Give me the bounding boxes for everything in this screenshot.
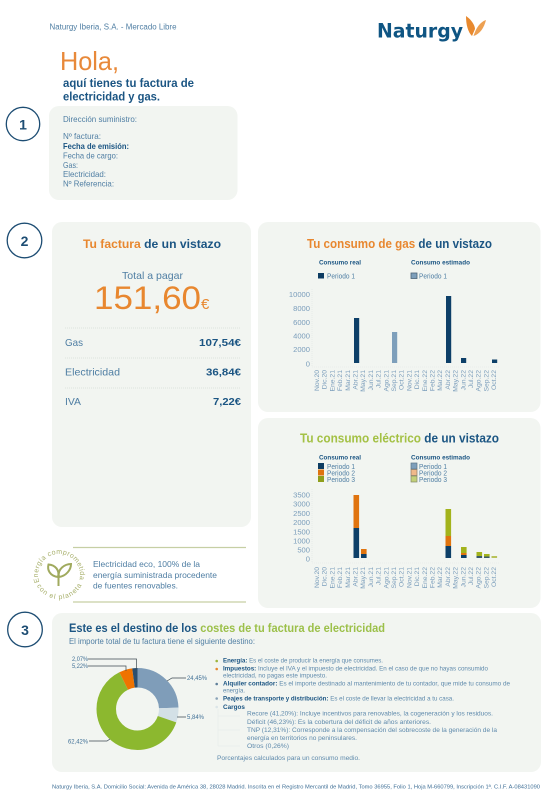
bar chart: electricity: 3000 [293, 500, 310, 508]
row: VAT: IVA [65, 396, 81, 408]
callout: eco electricity [34, 546, 246, 603]
bar chart: gas: May.21 [360, 370, 367, 392]
legend: gas: Periodo 1 [419, 272, 447, 280]
greeting: electricidad y gas. [63, 92, 160, 104]
panel: electricity consumption [258, 418, 540, 608]
bar chart: gas: Oct.21 [399, 370, 406, 390]
step number 2 [7, 223, 42, 258]
row: gas: 107,54€ [199, 337, 241, 349]
bar chart: gas: 6000 [293, 318, 310, 327]
legend: cost concepts: Energía: Es el coste de producir la energía que consumes. [223, 658, 383, 665]
bar chart: electricity: Ago.22 [476, 567, 483, 589]
bar chart: gas: 4000 [293, 332, 310, 340]
bar chart: gas: Abr.21 [352, 370, 360, 390]
legend: cost concepts: Otros (0,26%) [247, 743, 289, 750]
panel: bill summary [52, 222, 251, 527]
bar chart: electricity [293, 489, 500, 589]
greeting: aquí tienes tu factura de [63, 78, 194, 90]
row: gas: Gas [65, 337, 83, 349]
legend: electricity: Periodo 2 [419, 468, 447, 478]
bar chart: gas: 10000 [289, 290, 310, 299]
bar chart: electricity: Jun.22 [460, 567, 467, 587]
logo: Naturgy: Naturgy [377, 20, 463, 42]
bar chart: gas: Feb.22 [430, 370, 436, 391]
legend: gas: Periodo 1 [327, 272, 355, 280]
legend: cost concepts: Cargos [223, 704, 245, 711]
legend: cost concepts: Impuestos: Incluye el IVA y el impuesto de electricidad. En el caso de que no hayas consumido [223, 666, 488, 673]
bar chart: electricity: Nov.20 [314, 567, 321, 588]
badge: committed energy: con el planeta [37, 584, 82, 601]
bar chart: electricity: Jul.22 [468, 567, 475, 585]
total amount: 151,60 [94, 280, 201, 316]
bar chart: electricity: Mar.21 [345, 567, 352, 588]
bar chart: electricity: Dic.21 [414, 567, 421, 586]
legend: electricity: Periodo 2 [327, 468, 355, 478]
bar chart: gas: Jun.22 [460, 370, 467, 390]
legend: electricity: Consumo estimado [411, 456, 470, 462]
icon: sprout [48, 564, 71, 586]
bar chart: gas: Dic.20 [322, 370, 329, 389]
bar chart: gas: Nov.21 [406, 370, 413, 391]
bar chart: gas: Jul.21 [376, 370, 383, 388]
bar chart: gas: Dic.21 [414, 370, 421, 389]
legend: gas: Consumo real [319, 260, 361, 266]
row: electricity [65, 366, 241, 378]
dotted dividers [65, 328, 241, 388]
bar chart: electricity: Ago.21 [383, 567, 390, 589]
legend: electricity: Periodo 3 [419, 475, 447, 484]
legend: cost concepts: Alquiler contador: Es el importe destinado al mantenimiento de tu contador, que mide tu consumo de [223, 681, 510, 688]
bar chart: gas [289, 289, 500, 392]
bar chart: electricity: 500 [297, 546, 310, 554]
donut chart: 2,07% [72, 657, 89, 663]
bar chart: electricity: May.22 [453, 567, 460, 589]
bar chart: electricity: Feb.21 [337, 567, 344, 588]
row: VAT [65, 396, 241, 408]
panel: supply details [49, 106, 238, 200]
step number 1: 1 [19, 116, 27, 132]
bar chart: gas: 2000 [293, 345, 310, 354]
bar chart: electricity: 1500 [293, 528, 310, 536]
bar chart: electricity: 2500 [293, 509, 310, 518]
panel: supply details: Nº Referencia: [63, 180, 114, 188]
bar chart: gas: Mar.21 [345, 370, 352, 391]
bar chart: electricity: Ene.21 [329, 567, 336, 589]
bar chart: gas: Sep.21 [391, 370, 398, 392]
subtitle: El importe total de tu factura tiene el siguiente destino: [69, 637, 255, 646]
legend: cost concepts: TNP (12,31%): Corresponde a la compensación del sobrecoste de la generación de la [247, 727, 497, 734]
total amount [94, 270, 210, 316]
bar chart: electricity: Oct.21 [399, 567, 406, 587]
eco text: de fuentes renovables. [93, 580, 178, 590]
bar chart: gas: Oct.22 [491, 370, 498, 390]
badge: committed energy: Energía comprometida [34, 550, 86, 583]
bar chart: electricity: Dic.20 [322, 567, 329, 586]
legend: cost concepts: electricidad, no pagas este impuesto. [223, 672, 327, 679]
panel: supply details: Fecha de cargo: [63, 152, 118, 160]
heading: bill summary: Tu factura de un vistazo [83, 237, 221, 251]
eco text: Electricidad eco, 100% de la [93, 559, 200, 569]
bar chart: electricity: Sep.21 [391, 567, 398, 589]
step number 1 [6, 107, 40, 141]
legend: cost concepts: energía. [223, 688, 245, 695]
bar chart: electricity: Abr.21 [352, 567, 360, 587]
bar chart: electricity: Sep.22 [483, 567, 490, 589]
step number 3 [8, 612, 42, 647]
heading: cost breakdown: Este es el destino de los costes de tu factura de electricidad [69, 621, 385, 635]
legend: electricity: Periodo 1 [327, 462, 355, 471]
bar chart: electricity: Jul.21 [376, 567, 383, 585]
legend: cost concepts: Porcentajes calculados para un consumo medio. [217, 755, 360, 762]
row: electricity: Electricidad [65, 366, 120, 378]
bar chart: electricity: 3500 [293, 490, 310, 500]
legend: cost concepts: Déficit (46,23%): Es la cobertura del déficit de años anteriores. [247, 719, 431, 726]
donut chart: 62,42% [68, 740, 89, 746]
bar chart: gas: Nov.20 [314, 370, 321, 391]
bar chart: electricity: Oct.22 [491, 567, 498, 587]
legend: electricity: Consumo real [319, 456, 361, 462]
total amount: € [201, 296, 210, 313]
legend: cost concepts: Recore (41,20%): Incluye incentivos para renovables, la cogeneración y los residuos. [247, 710, 493, 718]
bar chart: electricity: Jun.21 [368, 567, 375, 587]
panel: supply details: Fecha de emisión: [63, 142, 129, 151]
bar chart: electricity: 1000 [293, 536, 310, 546]
bar chart: gas: Feb.21 [337, 370, 344, 391]
legend: cost concepts: Peajes de transporte y distribución: Es el coste de llevar la electricidad a tu casa. [223, 695, 454, 702]
panel: supply details: Nº factura: [63, 132, 101, 141]
panel: supply details: Dirección suministro: [63, 115, 137, 124]
bar chart: gas: Ago.22 [476, 370, 483, 392]
legend: cost concepts: energía en territorios no peninsulares. [247, 735, 357, 742]
heading: electricity consumption: Tu consumo eléctrico de un vistazo [300, 432, 499, 446]
legend: gas [318, 260, 470, 280]
panel: cost breakdown [52, 613, 541, 772]
eco text: energía suministrada procedente [93, 570, 217, 580]
badge: committed energy [34, 550, 86, 601]
row: gas [65, 337, 241, 349]
bar chart: gas: Ago.21 [383, 370, 390, 392]
bar chart: gas: Jun.21 [368, 370, 375, 390]
bar chart: gas: 0 [306, 360, 310, 368]
row: VAT: 7,22€ [213, 396, 241, 408]
bar chart: electricity: 2000 [293, 518, 310, 527]
company name header: Naturgy Iberia, S.A. - Mercado Libre [50, 22, 176, 32]
legend: electricity: Periodo 3 [327, 475, 355, 484]
bar chart: electricity: May.21 [360, 567, 367, 589]
panel: supply details: Gas: [63, 161, 78, 170]
donut chart: 24,45% [187, 676, 208, 682]
total amount: Total a pagar [122, 270, 183, 282]
greeting: Hola, [60, 46, 119, 76]
legend: electricity: Periodo 1 [419, 462, 447, 471]
bar chart: electricity: Mar.22 [437, 567, 444, 588]
bar chart: electricity: Abr.22 [445, 567, 452, 587]
bar chart: gas: Jul.22 [468, 370, 475, 388]
footer legal text: Naturgy Iberia, S.A. Domicilio Social: Avenida de América 38, 28028 Madrid. Inscrita en el Registro Mercantil de Madrid, Tomo 36955, Folio 1, Hoja M-660799, Inscripción 1ª. C.I.F. A-08431090 [52, 784, 540, 790]
greeting [60, 46, 194, 104]
bar chart: gas: 8000 [293, 304, 310, 313]
donut chart: 5,84% [187, 715, 205, 721]
heading: gas consumption: Tu consumo de gas de un vistazo [307, 237, 492, 251]
donut chart: 5,22% [72, 664, 89, 670]
legend: cost concepts [215, 658, 510, 762]
bar chart: gas: May.22 [453, 370, 460, 392]
step number 2: 2 [21, 233, 29, 249]
bar chart: electricity: Ene.22 [422, 567, 429, 589]
bar chart: electricity: Feb.22 [430, 567, 436, 588]
legend: electricity [318, 456, 470, 484]
bar chart: electricity: 0 [306, 554, 310, 564]
panel: gas consumption [258, 222, 540, 412]
eco text [93, 559, 217, 590]
row: electricity: 36,84€ [206, 366, 241, 378]
bar chart: gas: Mar.22 [437, 370, 444, 391]
bar chart: gas: Ene.21 [329, 370, 336, 392]
bar chart: gas: Ene.22 [422, 370, 429, 392]
bar chart: gas: Abr.22 [445, 370, 452, 390]
bar chart: electricity: Nov.21 [406, 567, 413, 588]
legend: gas: Consumo estimado [411, 260, 470, 266]
bar chart: gas: Sep.22 [483, 370, 490, 392]
step number 3: 3 [21, 622, 29, 638]
panel: supply details: Electricidad: [63, 170, 106, 179]
donut chart [68, 657, 208, 746]
